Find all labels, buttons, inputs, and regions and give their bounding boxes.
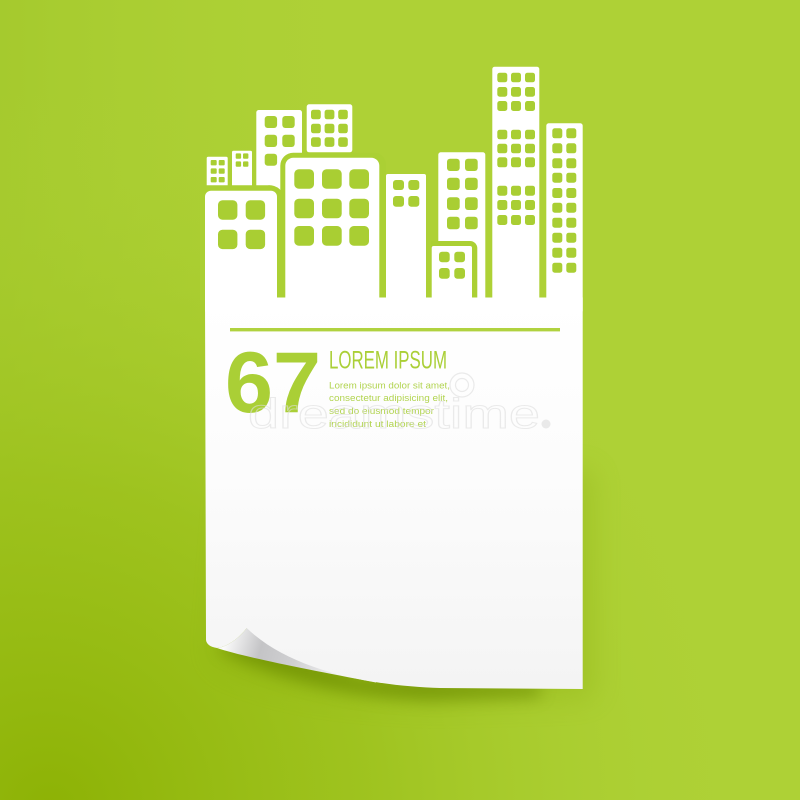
paper shadow bbox=[215, 470, 594, 702]
body text bbox=[329, 380, 450, 430]
big number 67: 67 bbox=[225, 335, 321, 431]
building: large centre bbox=[280, 153, 386, 318]
paper sheet bbox=[205, 298, 583, 689]
heading: LOREM IPSUM bbox=[329, 346, 447, 374]
building: tallest tower bbox=[492, 67, 539, 312]
body text: sed do eiusmod tempor bbox=[329, 406, 435, 417]
building: small front bbox=[431, 241, 477, 310]
building: back grid bbox=[307, 104, 352, 152]
watermark: dreamstime bbox=[248, 390, 540, 437]
body text: incididunt ut labore et bbox=[329, 419, 426, 430]
city skyline bbox=[200, 67, 583, 318]
watermark bbox=[248, 373, 550, 437]
building: mid tower bbox=[438, 152, 485, 312]
body text: Lorem ipsum dolor sit amet, bbox=[329, 380, 450, 392]
body text: consectetur adipisicing elit, bbox=[329, 393, 448, 404]
building: front left bbox=[200, 185, 285, 316]
building: back tall left bbox=[256, 110, 302, 190]
divider line bbox=[230, 328, 560, 331]
building: small second bbox=[232, 151, 252, 187]
building: right tower bbox=[546, 123, 583, 313]
page curl bbox=[217, 620, 380, 682]
building: small far left bbox=[207, 157, 228, 187]
building: narrow middle bbox=[386, 174, 426, 314]
